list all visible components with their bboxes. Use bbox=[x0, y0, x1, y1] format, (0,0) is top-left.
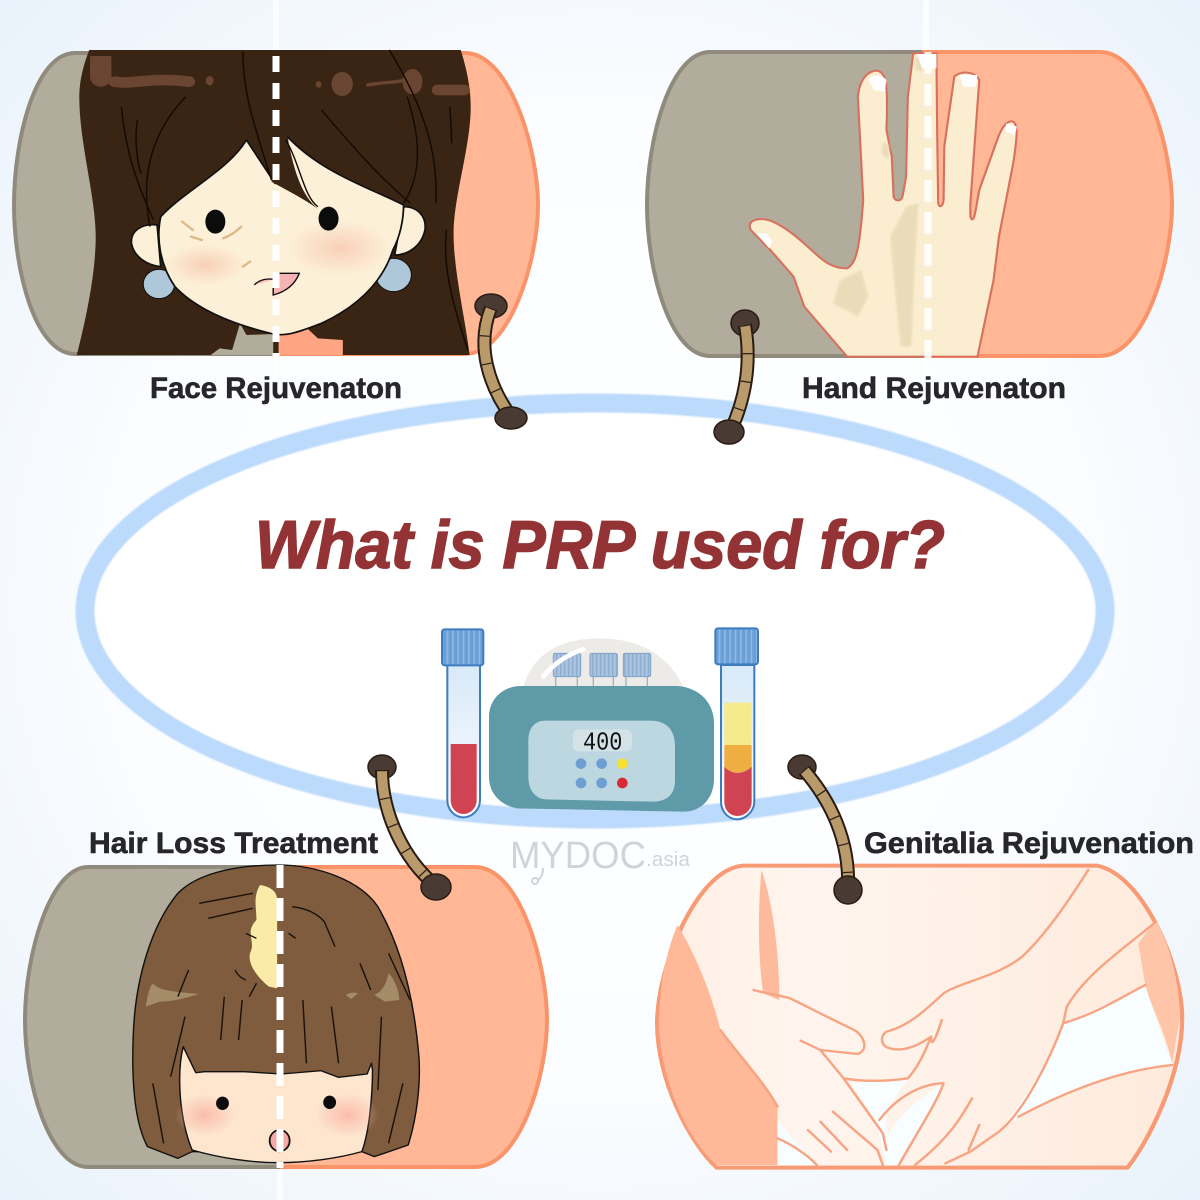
panel: face rejuvenation bbox=[14, 50, 538, 356]
hand shading bbox=[833, 57, 926, 347]
right eye bbox=[319, 207, 339, 231]
hand and body outlines bbox=[720, 870, 1172, 1165]
mouth bbox=[270, 1130, 290, 1151]
face illustration bbox=[77, 50, 471, 355]
face skin bbox=[159, 137, 404, 335]
display reading: 400 bbox=[583, 727, 622, 757]
label: hand rejuvenation: Hand Rejuvenaton bbox=[802, 372, 1066, 405]
left ear bbox=[131, 225, 161, 267]
label: hair loss treatment: Hair Loss Treatment bbox=[89, 827, 378, 860]
title: What is PRP used for? bbox=[255, 507, 945, 583]
panel: hair loss treatment bbox=[25, 865, 547, 1168]
shadow: right side bbox=[1138, 920, 1180, 1063]
control panel bbox=[528, 721, 675, 802]
connector: hair to oval bbox=[368, 755, 451, 900]
logo watermark bbox=[510, 835, 691, 884]
capsule background: skin bbox=[657, 866, 1182, 1168]
centrifuge and test tubes bbox=[442, 628, 758, 819]
neck bbox=[211, 323, 343, 355]
hair lock over forehead bbox=[271, 127, 318, 209]
display bbox=[573, 729, 632, 751]
shadow: left side bbox=[659, 925, 777, 1165]
right ear bbox=[395, 207, 425, 255]
hand illustration bbox=[750, 53, 1017, 357]
wrinkles bbox=[182, 222, 250, 267]
oval ring bbox=[85, 403, 1105, 819]
shadow: top wedge bbox=[759, 870, 779, 1000]
capsule background: hand bbox=[647, 52, 1172, 356]
connector: genitalia to oval bbox=[788, 755, 862, 904]
centrifuge body bbox=[489, 686, 714, 812]
dashed split line: hand bbox=[924, 52, 932, 358]
right test tube bbox=[715, 628, 758, 819]
blush bbox=[174, 1094, 235, 1136]
eyes bbox=[216, 1097, 229, 1110]
fingernails bbox=[756, 54, 1017, 248]
panel: genitalia rejuvenation bbox=[657, 866, 1182, 1168]
mouth bbox=[254, 273, 299, 295]
white cloth areas bbox=[777, 987, 1172, 1165]
small tubes in dome bbox=[543, 649, 651, 686]
connector: hand to oval bbox=[714, 310, 759, 444]
label: face rejuvenation: Face Rejuvenaton bbox=[150, 372, 402, 405]
connector: face to oval bbox=[475, 294, 527, 429]
hair highlights bbox=[101, 58, 464, 96]
bob hair illustration bbox=[133, 865, 419, 1163]
logo watermark: .asia bbox=[646, 849, 691, 871]
logo watermark: MYDOC bbox=[510, 835, 646, 877]
buttons bbox=[576, 758, 628, 788]
hair strands bbox=[153, 893, 410, 1143]
right earring bbox=[376, 258, 411, 292]
dashed split line: hair bbox=[276, 865, 284, 1168]
left test tube bbox=[442, 629, 483, 817]
panel: hand rejuvenation bbox=[647, 52, 1172, 358]
hair highlights bbox=[146, 973, 399, 1007]
label: genitalia rejuvenation: Genitalia Rejuvenation bbox=[864, 827, 1194, 860]
dashed split line: face bbox=[272, 56, 280, 356]
left earring bbox=[143, 269, 175, 299]
face bbox=[180, 1047, 372, 1163]
left eye bbox=[205, 210, 225, 234]
hair strands bbox=[121, 50, 468, 350]
brown hair bbox=[133, 865, 419, 1158]
capsule background: hair bbox=[25, 867, 547, 1167]
capsule background: face bbox=[14, 53, 538, 354]
long dark hair bbox=[77, 50, 471, 355]
thin scalp patch bbox=[250, 885, 277, 988]
cheek blush bbox=[164, 244, 246, 286]
hand shape bbox=[750, 53, 1017, 357]
centrifuge dome bbox=[523, 638, 683, 687]
